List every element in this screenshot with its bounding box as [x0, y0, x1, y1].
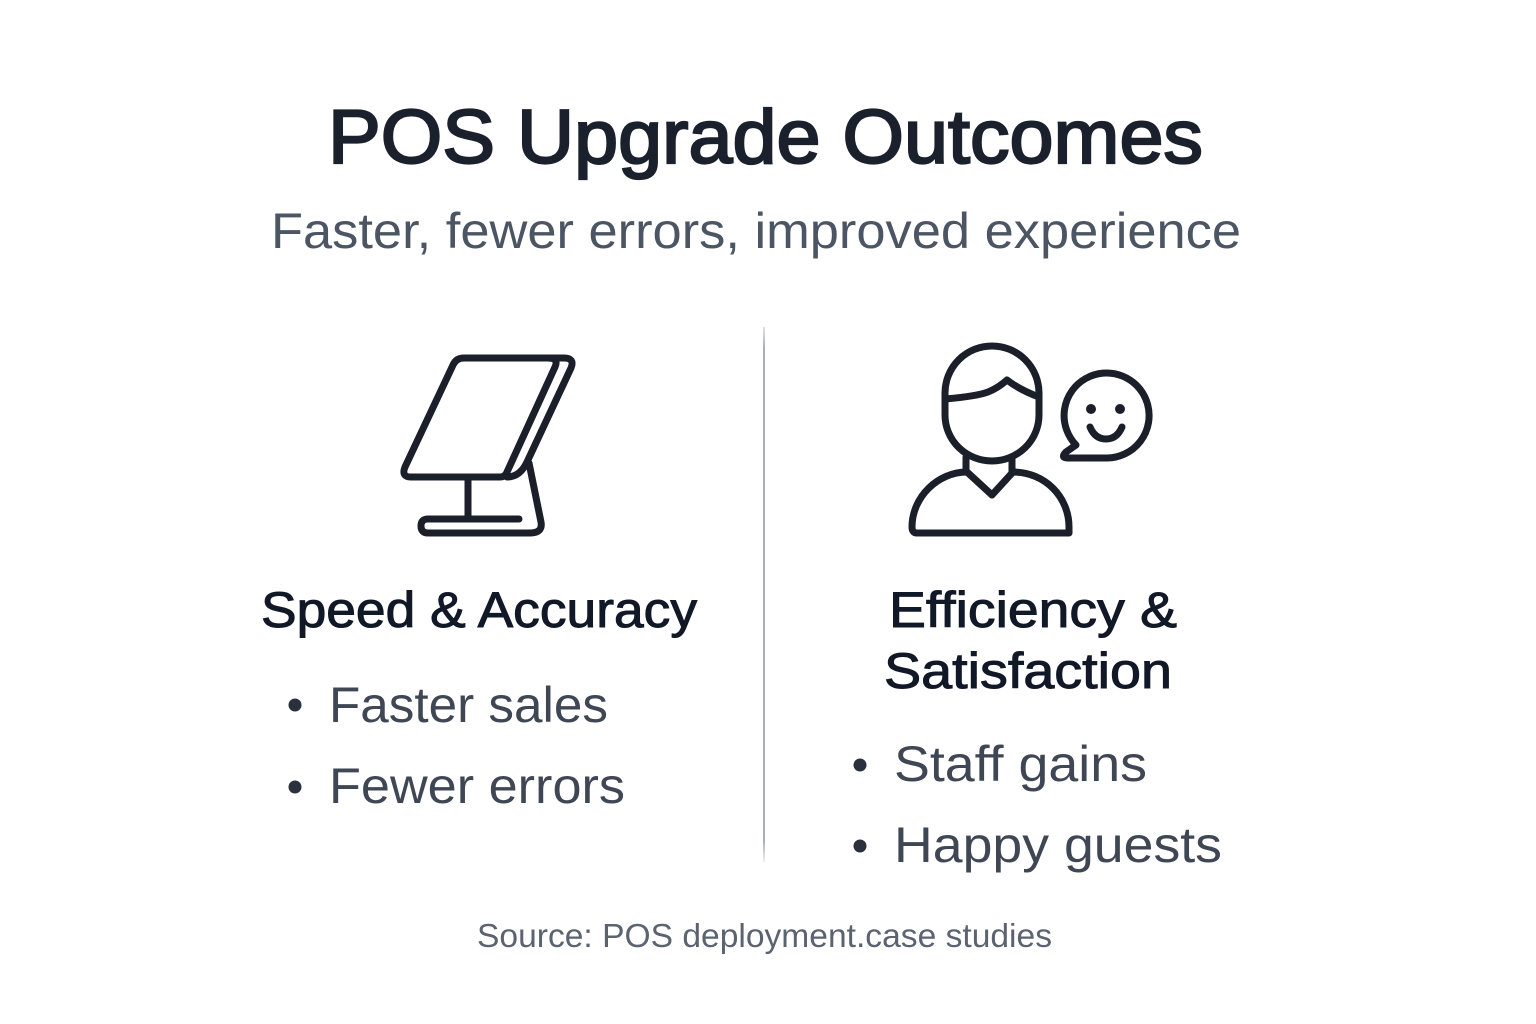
bullet list: efficiency and satisfaction: Happy guests — [894, 817, 1222, 873]
heading: efficiency and satisfaction: Efficiency & — [889, 582, 1177, 638]
bullet list: efficiency and satisfaction: Staff gains — [894, 736, 1147, 792]
source note: Source: POS deployment.case studies — [477, 917, 1052, 954]
bullet list: efficiency and satisfaction — [854, 736, 1222, 873]
heading: efficiency and satisfaction — [884, 582, 1177, 699]
panel: efficiency and satisfaction — [854, 346, 1222, 873]
heading: speed and accuracy: Speed & Accuracy — [261, 582, 697, 638]
icon: person with smiling speech bubble — [912, 346, 1149, 533]
bullet list: speed and accuracy — [288, 677, 625, 814]
subtitle: Faster, fewer errors, improved experience — [271, 203, 1241, 259]
bullet list: speed and accuracy: Fewer errors — [329, 758, 625, 814]
icon: POS terminal — [404, 358, 572, 533]
panel: speed and accuracy — [261, 358, 697, 814]
title: POS Upgrade Outcomes — [328, 95, 1203, 180]
bullet list: speed and accuracy: Faster sales — [329, 677, 608, 733]
heading: efficiency and satisfaction: Satisfaction — [884, 643, 1172, 699]
